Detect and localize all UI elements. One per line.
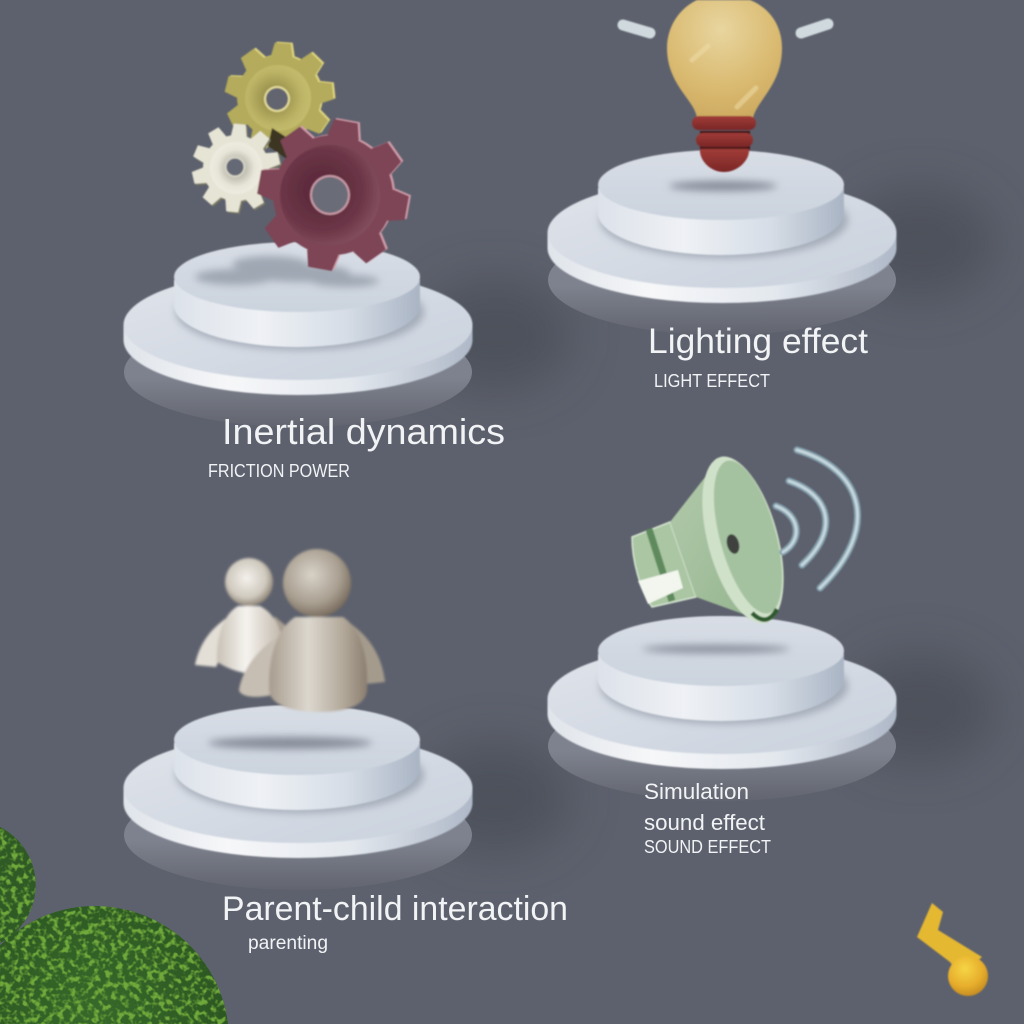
yellow gear [220, 38, 340, 155]
subheading: FRICTION POWER [208, 461, 350, 481]
speaker centre [725, 533, 741, 555]
left ray [623, 25, 650, 33]
sound waves [776, 450, 858, 588]
white gear [188, 120, 285, 217]
white band [638, 570, 683, 604]
right ray [801, 24, 828, 33]
speaker cone [670, 458, 768, 623]
red gear [246, 107, 422, 282]
bush: large [0, 906, 228, 1024]
icon: two people [195, 549, 385, 712]
bush: small [0, 827, 36, 943]
gear shadow on platform [195, 256, 379, 287]
platform [548, 616, 994, 801]
green stripe [649, 529, 672, 601]
subheading: SOUND EFFECT [644, 837, 771, 857]
icon: light bulb [623, 0, 828, 172]
child figure [195, 558, 291, 673]
heading: Parent-child interaction [222, 890, 568, 928]
heading: Inertial dynamics [222, 411, 505, 452]
platform [124, 242, 570, 427]
panel: inertial dynamics [124, 38, 570, 481]
panel: simulation sound effect [548, 448, 994, 857]
glass [667, 0, 782, 118]
subheading: parenting [248, 933, 328, 954]
speaker neck [632, 522, 696, 607]
heading: Lighting effect [648, 322, 868, 361]
bell inner [700, 453, 796, 621]
panel: lighting effect [548, 0, 994, 391]
screw base [700, 131, 750, 150]
parent figure [239, 549, 385, 712]
icon: gears [188, 38, 422, 282]
bulb shadow on platform [669, 181, 777, 191]
icon: music note [917, 903, 988, 996]
bell rim [687, 448, 799, 632]
rim shadow [752, 609, 777, 620]
speaker shadow on platform [642, 645, 790, 653]
icon: speaker [632, 448, 858, 632]
platform [124, 705, 570, 890]
heading: sound effect [644, 810, 765, 835]
glass highlights [692, 46, 756, 107]
subheading: LIGHT EFFECT [654, 371, 770, 391]
panel: parent-child interaction [124, 549, 570, 954]
platform [548, 150, 994, 335]
people shadow on platform [208, 737, 372, 749]
heading: Simulation [644, 779, 749, 804]
shadow between gears [268, 128, 300, 160]
